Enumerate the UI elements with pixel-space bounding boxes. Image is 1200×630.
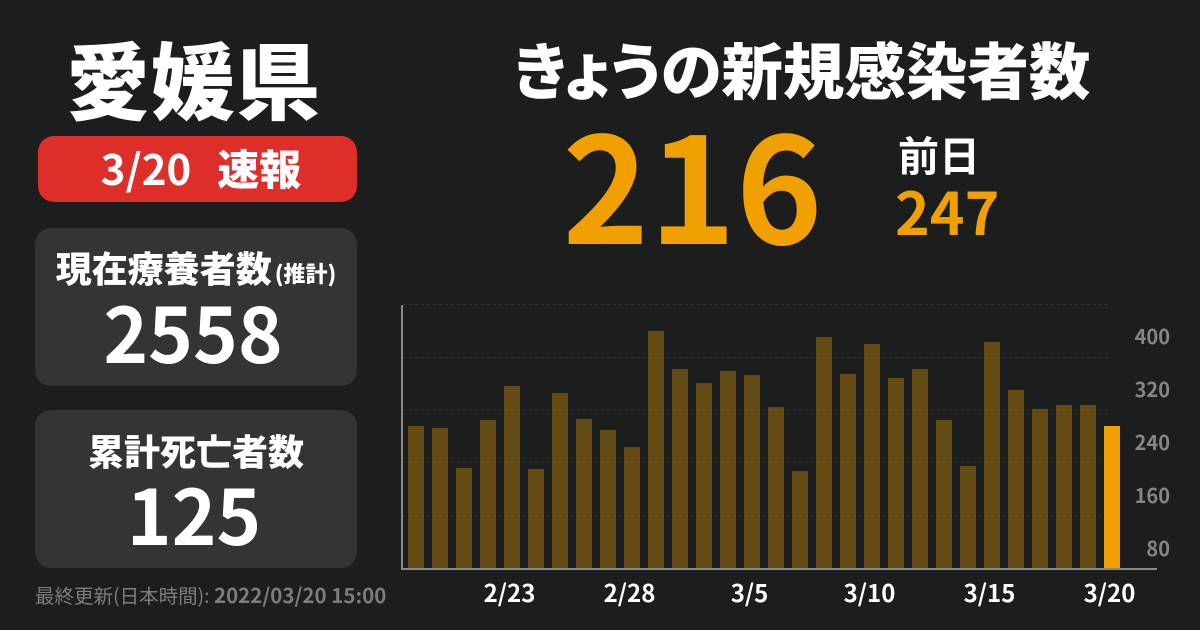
bar: today (1104, 426, 1120, 568)
panel heading: current patients: 現在療養者数(推計) (56, 241, 336, 293)
x axis labels (484, 574, 1135, 609)
y axis labels (1135, 321, 1170, 562)
x axis labels: 2/23 (484, 574, 535, 609)
last updated note: 最終更新(日本時間): 2022/03/20 15:00 (35, 579, 386, 609)
value: current patients: 2558 (103, 275, 283, 385)
y axis labels: 240 (1135, 427, 1170, 456)
axes (401, 305, 1157, 570)
panel: current patients (35, 228, 357, 386)
value: cumulative deaths: 125 (127, 457, 261, 567)
y axis labels: 400 (1135, 321, 1170, 350)
y axis labels: 320 (1135, 374, 1170, 403)
x axis labels: 3/15 (964, 574, 1015, 609)
panel: cumulative deaths (35, 410, 357, 568)
badge text: 3/20 速報 (101, 137, 301, 198)
title: prefecture: 愛媛県 (66, 17, 321, 138)
x axis labels: 2/28 (604, 574, 655, 609)
y axis labels: 80 (1146, 533, 1170, 562)
badge: date and flash report (38, 136, 357, 202)
label: previous day: 前日 (898, 123, 980, 183)
y axis labels: 160 (1135, 480, 1170, 509)
x axis labels: 3/10 (844, 574, 895, 609)
panel heading: cumulative deaths: 累計死亡者数 (88, 424, 304, 476)
bars: previous days (408, 331, 1096, 568)
heading: new cases today: きょうの新規感染者数 (514, 23, 1090, 112)
x axis labels: 3/5 (731, 574, 768, 609)
value: new cases today: 216 (562, 74, 823, 287)
value: previous day: 247 (895, 167, 999, 252)
x axis labels: 3/20 (1084, 574, 1135, 609)
